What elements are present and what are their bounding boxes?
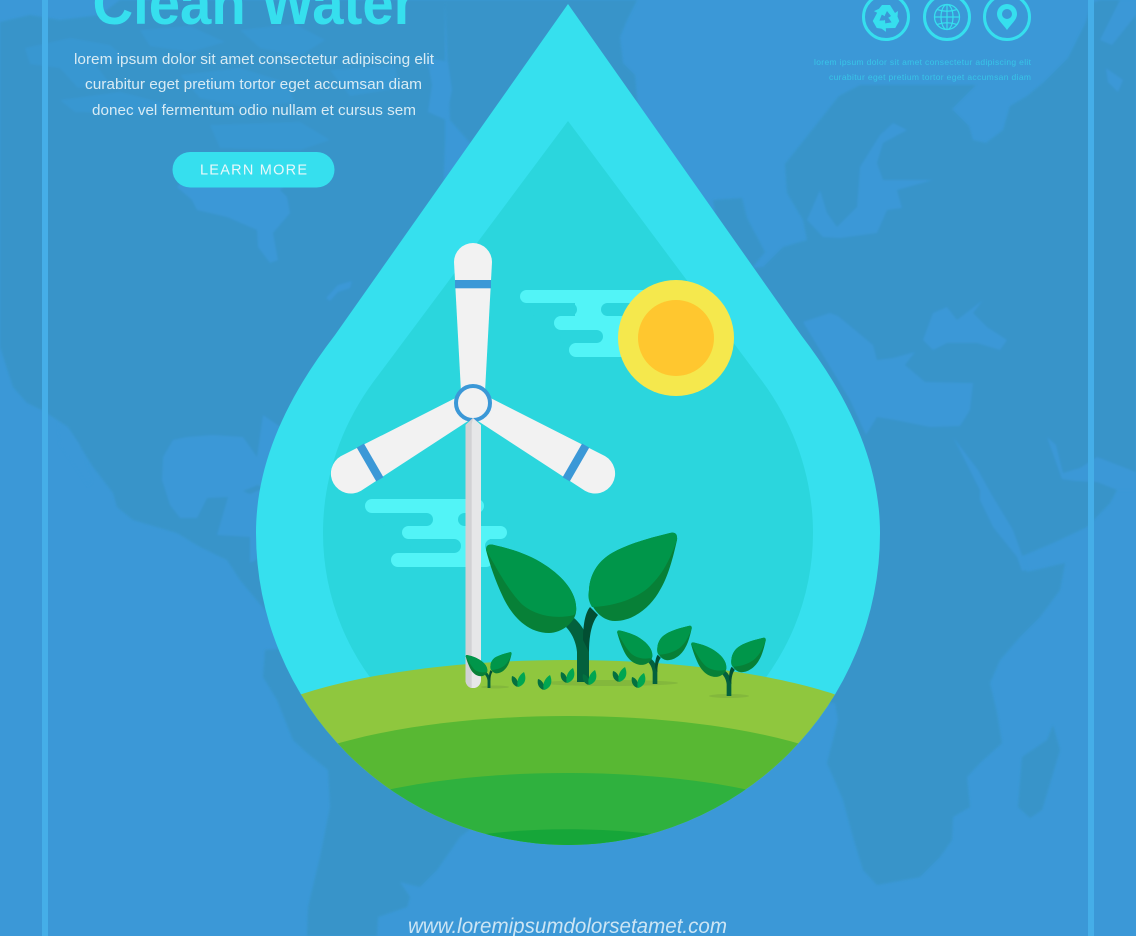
- side stripe: left: [42, 0, 48, 936]
- intro text: [74, 51, 435, 119]
- water drop: outer: [256, 4, 880, 845]
- water: Baffin Bay: [427, 57, 452, 120]
- plant: large: [486, 533, 677, 682]
- ground shadows: [481, 680, 749, 698]
- water: Persian Gulf and Arabian Sea: [1047, 437, 1136, 490]
- ground layers: [301, 660, 835, 845]
- land: Cuba: [243, 485, 264, 494]
- icon: recycle: [864, 0, 908, 40]
- land: Eurasia and Africa: [700, 0, 1136, 885]
- land: South America: [263, 640, 560, 936]
- turbine blades: [324, 243, 622, 501]
- intro text: donec vel fermentum odio nullam et cursus sem: [92, 102, 416, 119]
- learn more button: LEARN MORE: [200, 162, 307, 178]
- sun: [618, 280, 734, 396]
- turbine hub: [456, 386, 490, 420]
- water: Hudson Bay: [177, 160, 300, 263]
- water: Mediterranean Sea: [803, 313, 973, 435]
- plant: medium centre: [617, 626, 692, 684]
- plant: medium right: [691, 638, 766, 696]
- water drop: inner: [323, 121, 813, 778]
- water: Gulf of Mexico and Caribbean: [162, 415, 285, 563]
- intro text: curabitur eget pretium tortor eget accumsan diam: [85, 76, 422, 93]
- intro text: lorem ipsum dolor sit amet consectetur adipiscing elit: [74, 51, 435, 68]
- turbine tower: [465, 418, 481, 688]
- land: Britain: [713, 198, 765, 268]
- water: Great Lakes: [326, 281, 352, 301]
- side stripe: right: [1088, 0, 1094, 936]
- water: Red Sea: [953, 437, 1027, 571]
- learn more button: [172, 152, 334, 188]
- small caption text: lorem ipsum dolor sit amet consectetur adipiscing elit: [814, 57, 1032, 67]
- icon: globe: [924, 0, 970, 40]
- land: Greenland: [445, 0, 640, 200]
- water: northern sea: [1100, 0, 1136, 92]
- land: Madagascar: [1018, 725, 1060, 818]
- water: Black Sea: [923, 300, 1007, 350]
- cloud: lower: [365, 499, 515, 567]
- water: Arctic channels: [25, 24, 400, 150]
- land: North America: [0, 0, 445, 640]
- wind turbine: [324, 243, 622, 688]
- water: Gulf of California: [58, 423, 92, 486]
- water: Baltic Sea: [807, 123, 933, 238]
- plant: small by tower: [466, 652, 512, 688]
- cloud: upper: [520, 290, 654, 357]
- small caption text: curabitur eget pretium tortor eget accumsan diam: [829, 72, 1031, 82]
- icon: map pin: [984, 0, 1030, 40]
- small caption text: [814, 57, 1032, 82]
- sprouts: [512, 667, 645, 690]
